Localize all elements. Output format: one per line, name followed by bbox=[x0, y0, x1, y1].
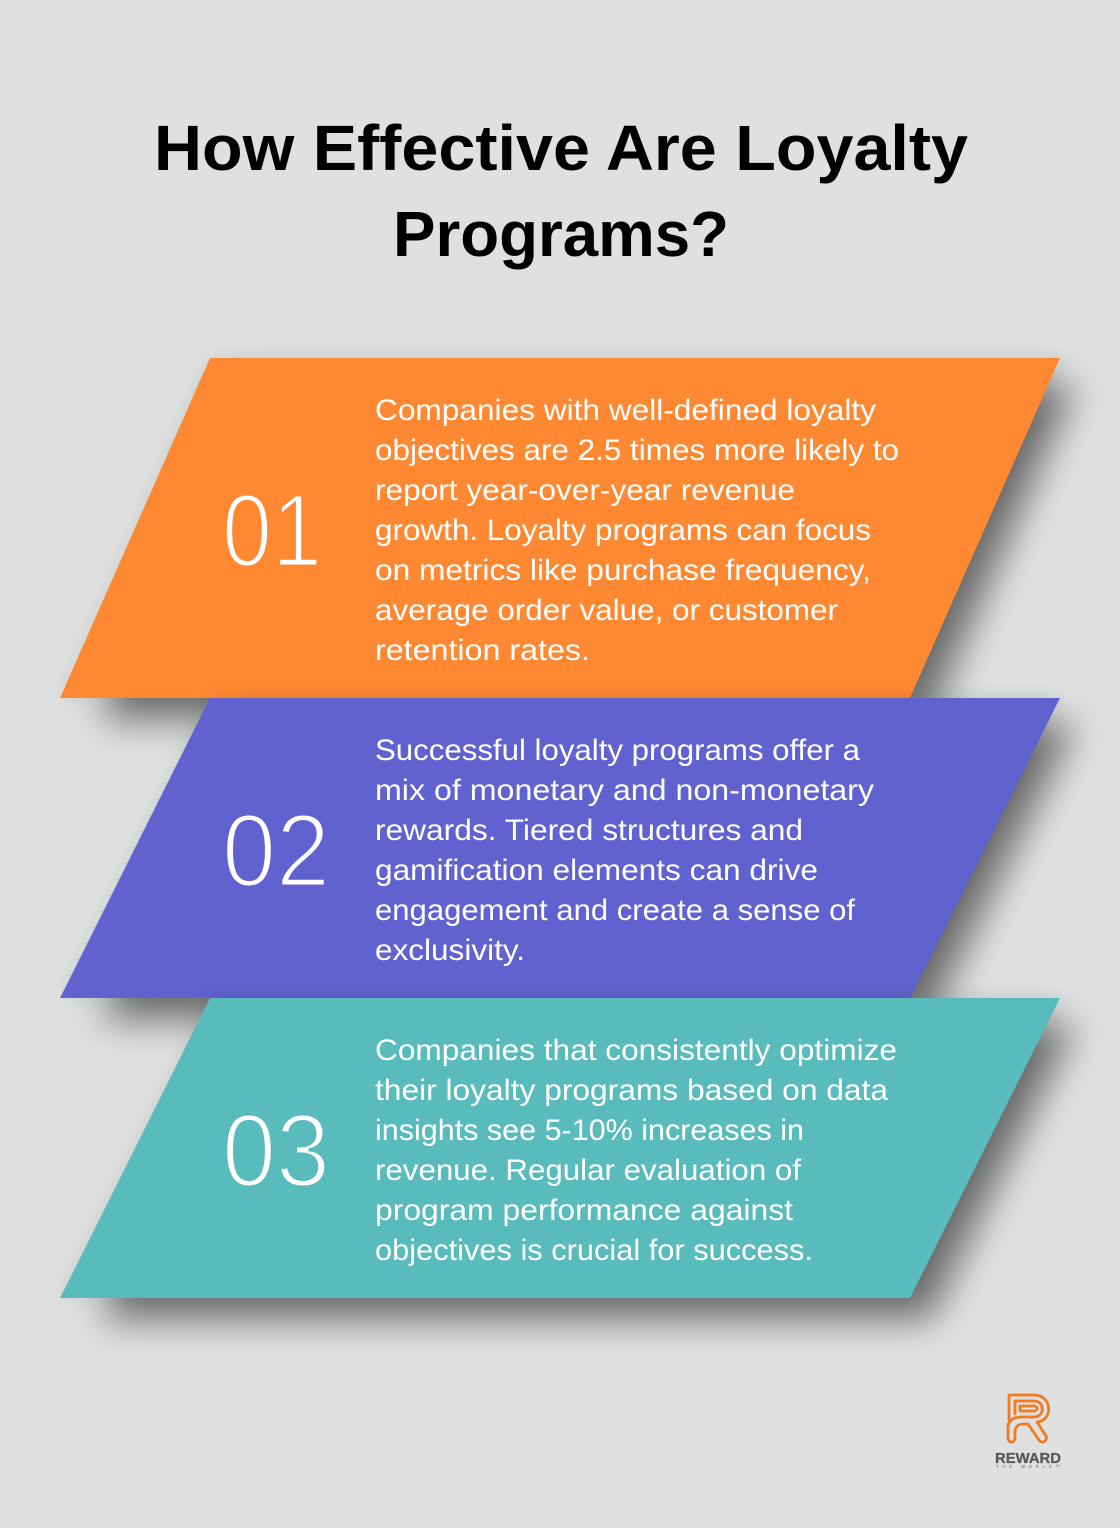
parallelogram: orange bbox=[60, 358, 1060, 698]
tagline: THE WORLD™ bbox=[996, 1464, 1060, 1469]
text block 01: retention rates. bbox=[375, 634, 590, 667]
text block 03: insights see 5-10% increases in bbox=[375, 1114, 804, 1147]
text block 02: Successful loyalty programs offer a bbox=[375, 734, 860, 767]
text block 02: gamification elements can drive bbox=[375, 854, 818, 887]
text block 03: Companies that consistently optimize bbox=[375, 1034, 897, 1067]
text block 01: objectives are 2.5 times more likely to bbox=[375, 434, 899, 467]
text block 03: program performance against bbox=[375, 1194, 794, 1227]
text block 03: objectives is crucial for success. bbox=[375, 1234, 813, 1267]
text block 02: exclusivity. bbox=[375, 934, 525, 967]
text block 01: on metrics like purchase frequency, bbox=[375, 554, 871, 587]
text block 03: their loyalty programs based on data bbox=[375, 1074, 888, 1107]
panel: step 02 bbox=[60, 698, 1076, 1020]
parallelogram: indigo bbox=[60, 698, 1060, 998]
parallelogram: teal bbox=[60, 998, 1060, 1298]
text block 01: growth. Loyalty programs can focus bbox=[375, 514, 871, 547]
number 01: 01 bbox=[222, 473, 322, 588]
panel: step 03 bbox=[60, 998, 1076, 1320]
number 02: 02 bbox=[222, 793, 330, 908]
panel: step 01 bbox=[60, 358, 1076, 720]
wordmark: REWARD bbox=[995, 1450, 1061, 1467]
icon: R mark bbox=[1008, 1395, 1049, 1442]
text block 01: Companies with well-defined loyalty bbox=[375, 394, 876, 427]
title bbox=[154, 112, 968, 270]
number 03: 03 bbox=[222, 1093, 330, 1208]
text block 03 bbox=[375, 1034, 897, 1267]
text block 01 bbox=[375, 394, 899, 667]
logo: Reward the World bbox=[995, 1395, 1061, 1469]
title: Programs? bbox=[393, 198, 729, 270]
text block 02 bbox=[375, 734, 874, 967]
text block 03: revenue. Regular evaluation of bbox=[375, 1154, 802, 1187]
text block 02: engagement and create a sense of bbox=[375, 894, 856, 927]
text block 02: mix of monetary and non-monetary bbox=[375, 774, 874, 807]
text block 02: rewards. Tiered structures and bbox=[375, 814, 803, 847]
title: How Effective Are Loyalty bbox=[154, 112, 968, 184]
text block 01: report year-over-year revenue bbox=[375, 474, 795, 507]
text block 01: average order value, or customer bbox=[375, 594, 838, 627]
